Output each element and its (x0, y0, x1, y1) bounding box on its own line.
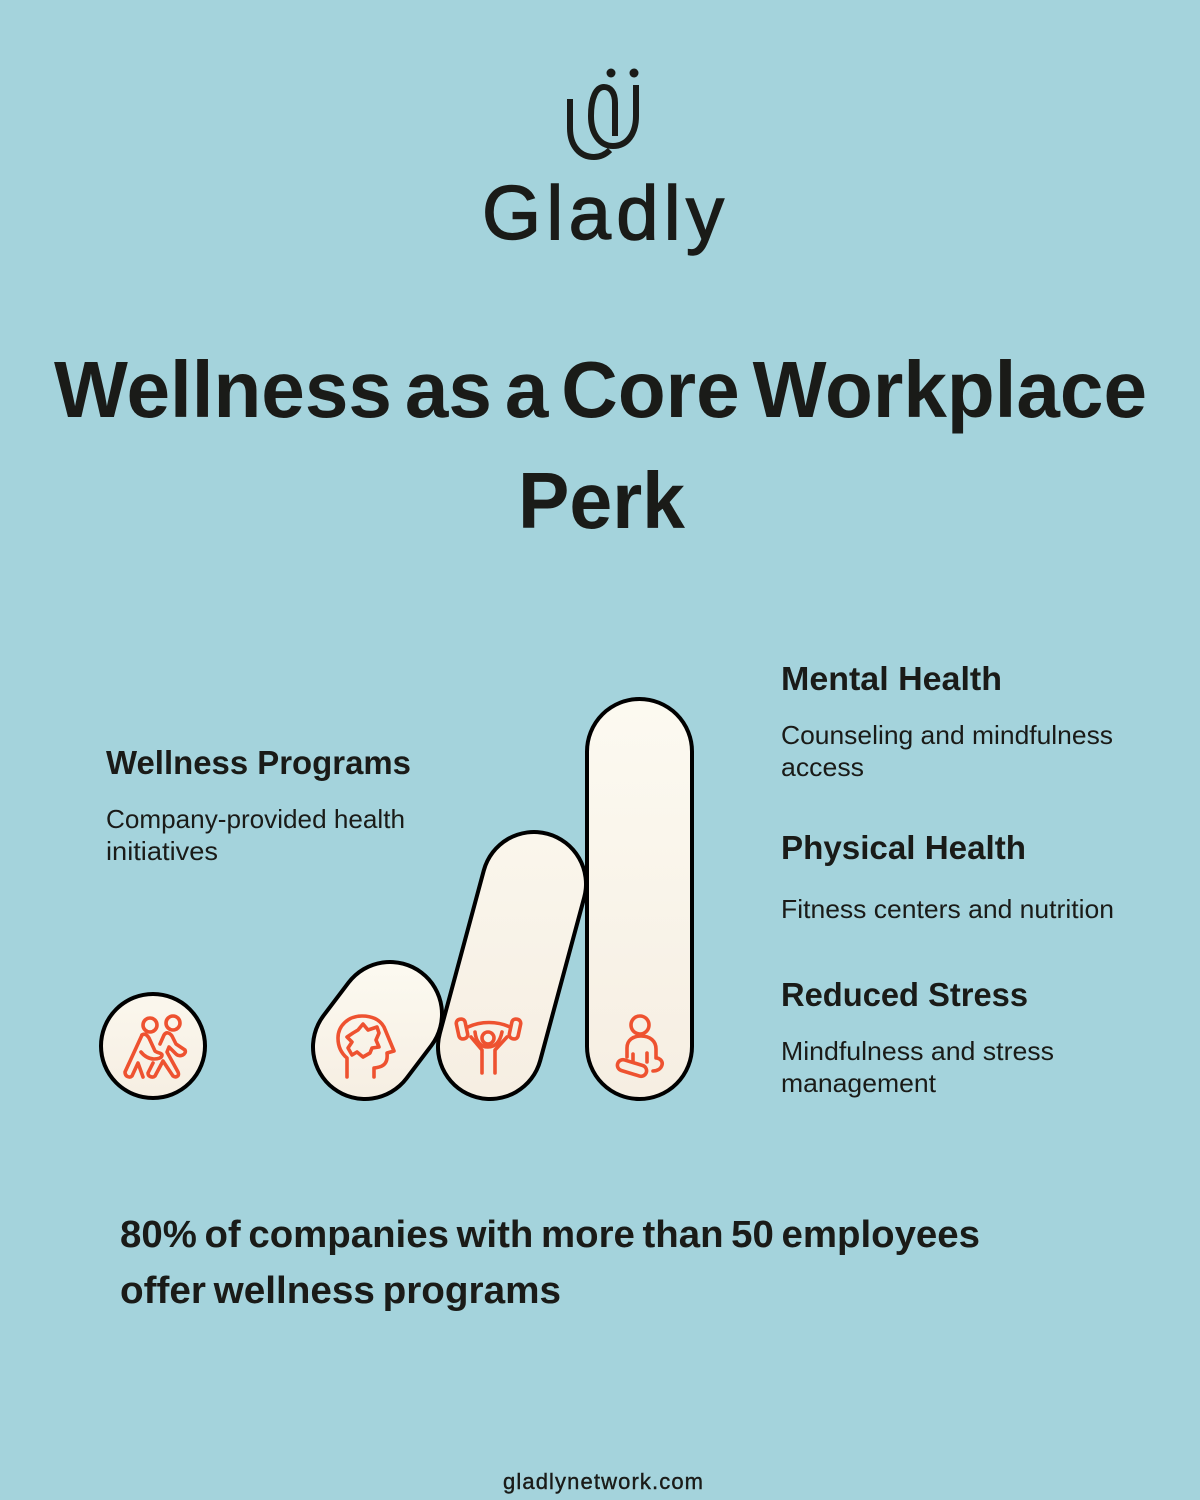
left label: Wellness Programs (106, 744, 411, 866)
title: Perk (518, 456, 685, 545)
logo icon (570, 68, 638, 157)
left label: Wellness Programs: Wellness Programs (106, 744, 411, 781)
step 2: short tilted pill with mind icon (338, 1014, 394, 1077)
right label: Physical Health (781, 829, 1114, 924)
footer website: gladlynetwork.com (503, 1469, 703, 1494)
right label: Reduced Stress (781, 976, 1054, 1098)
step 4: tallest pill with meditation icon (587, 699, 692, 1099)
right label: Reduced Stress: Mindfulness and stress (781, 1036, 1054, 1066)
step 1: circle with walking people icon (101, 994, 205, 1098)
right label: Mental Health: access (781, 752, 864, 782)
statistic callout: offer wellness programs (120, 1270, 561, 1312)
right label: Reduced Stress: management (781, 1068, 937, 1098)
left label: Wellness Programs: Company-provided health (106, 804, 405, 834)
logo wordmark: Gladly (482, 171, 724, 256)
statistic callout: 80% of companies with more than 50 employees (120, 1214, 980, 1256)
title: Wellness as a Core Workplace (54, 345, 1147, 434)
statistic callout (120, 1214, 980, 1312)
left label: Wellness Programs: initiatives (106, 836, 218, 866)
right label: Mental Health: Counseling and mindfulness (781, 720, 1113, 750)
right label: Mental Health (781, 660, 1113, 782)
right label: Mental Health: Mental Health (781, 660, 1002, 697)
chart: rising pills (101, 699, 692, 1099)
right label: Physical Health: Physical Health (781, 829, 1026, 866)
right label: Reduced Stress: Reduced Stress (781, 976, 1028, 1013)
title (54, 345, 1147, 545)
step 3: tall tilted pill with weightlifter icon (456, 884, 534, 1073)
right label: Physical Health: Fitness centers and nutrition (781, 894, 1114, 924)
